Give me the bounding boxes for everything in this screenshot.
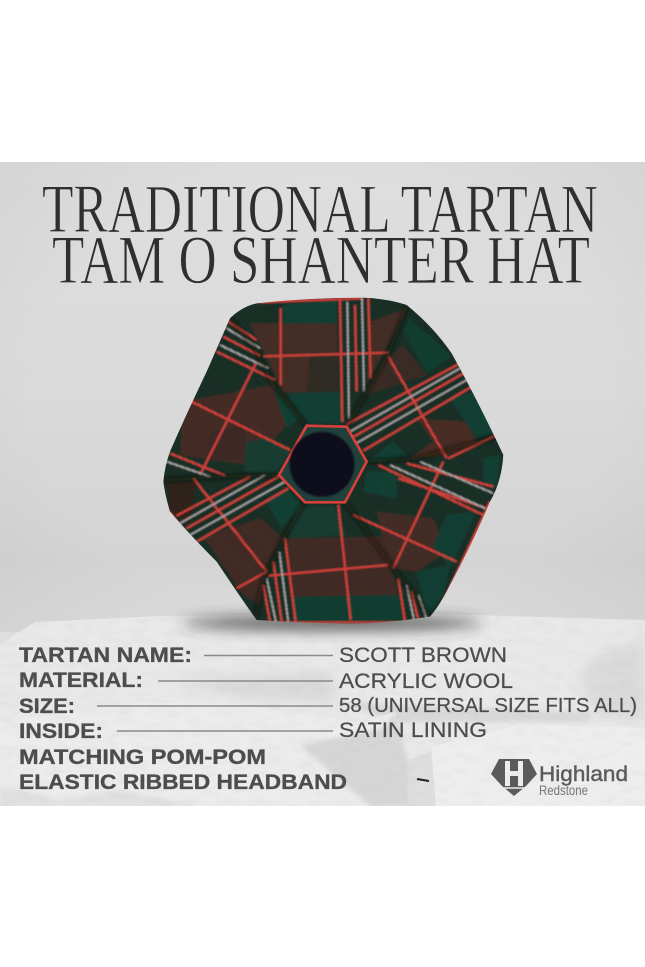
red tartan lines	[170, 298, 500, 622]
twill weave texture	[164, 298, 502, 624]
spec values: 58 (UNIVERSAL SIZE FITS ALL)	[339, 694, 637, 717]
title	[42, 171, 598, 298]
spec labels: INSIDE:	[19, 719, 103, 743]
stone plinth	[0, 612, 645, 806]
white tartan lines	[167, 298, 493, 622]
spec values	[339, 643, 637, 742]
spec labels: TARTAN NAME:	[19, 643, 192, 667]
spec labels: SIZE:	[19, 694, 75, 718]
spec labels: ELASTIC RIBBED HEADBAND	[19, 770, 347, 794]
grey studio backdrop panel	[0, 162, 645, 806]
fabric crease shadows	[163, 307, 503, 620]
spec values: SATIN LINING	[339, 718, 487, 742]
navy pom-pom	[290, 432, 354, 497]
spec values: SCOTT BROWN	[339, 643, 507, 667]
tartan hat	[163, 298, 504, 624]
specification list	[19, 643, 637, 794]
logo mark	[491, 759, 537, 796]
brown and green tartan blocks	[167, 300, 500, 624]
spec labels: MATERIAL:	[19, 668, 143, 692]
infographic canvas	[0, 162, 645, 806]
spec labels: MATCHING POM-POM	[19, 745, 266, 769]
backdrop vignette	[0, 162, 645, 632]
hat contact shadow	[182, 616, 482, 630]
brand logo	[491, 759, 628, 798]
centre hexagon band	[279, 426, 367, 502]
hat base fabric	[163, 298, 504, 624]
spec labels	[19, 643, 347, 794]
leader lines	[97, 656, 333, 731]
logo wordmark: Highland	[539, 763, 628, 786]
stone shading	[1, 638, 645, 806]
logo sub-wordmark: Redstone	[539, 783, 588, 798]
spec values: ACRYLIC WOOL	[339, 669, 513, 693]
top stone slab	[0, 613, 645, 806]
